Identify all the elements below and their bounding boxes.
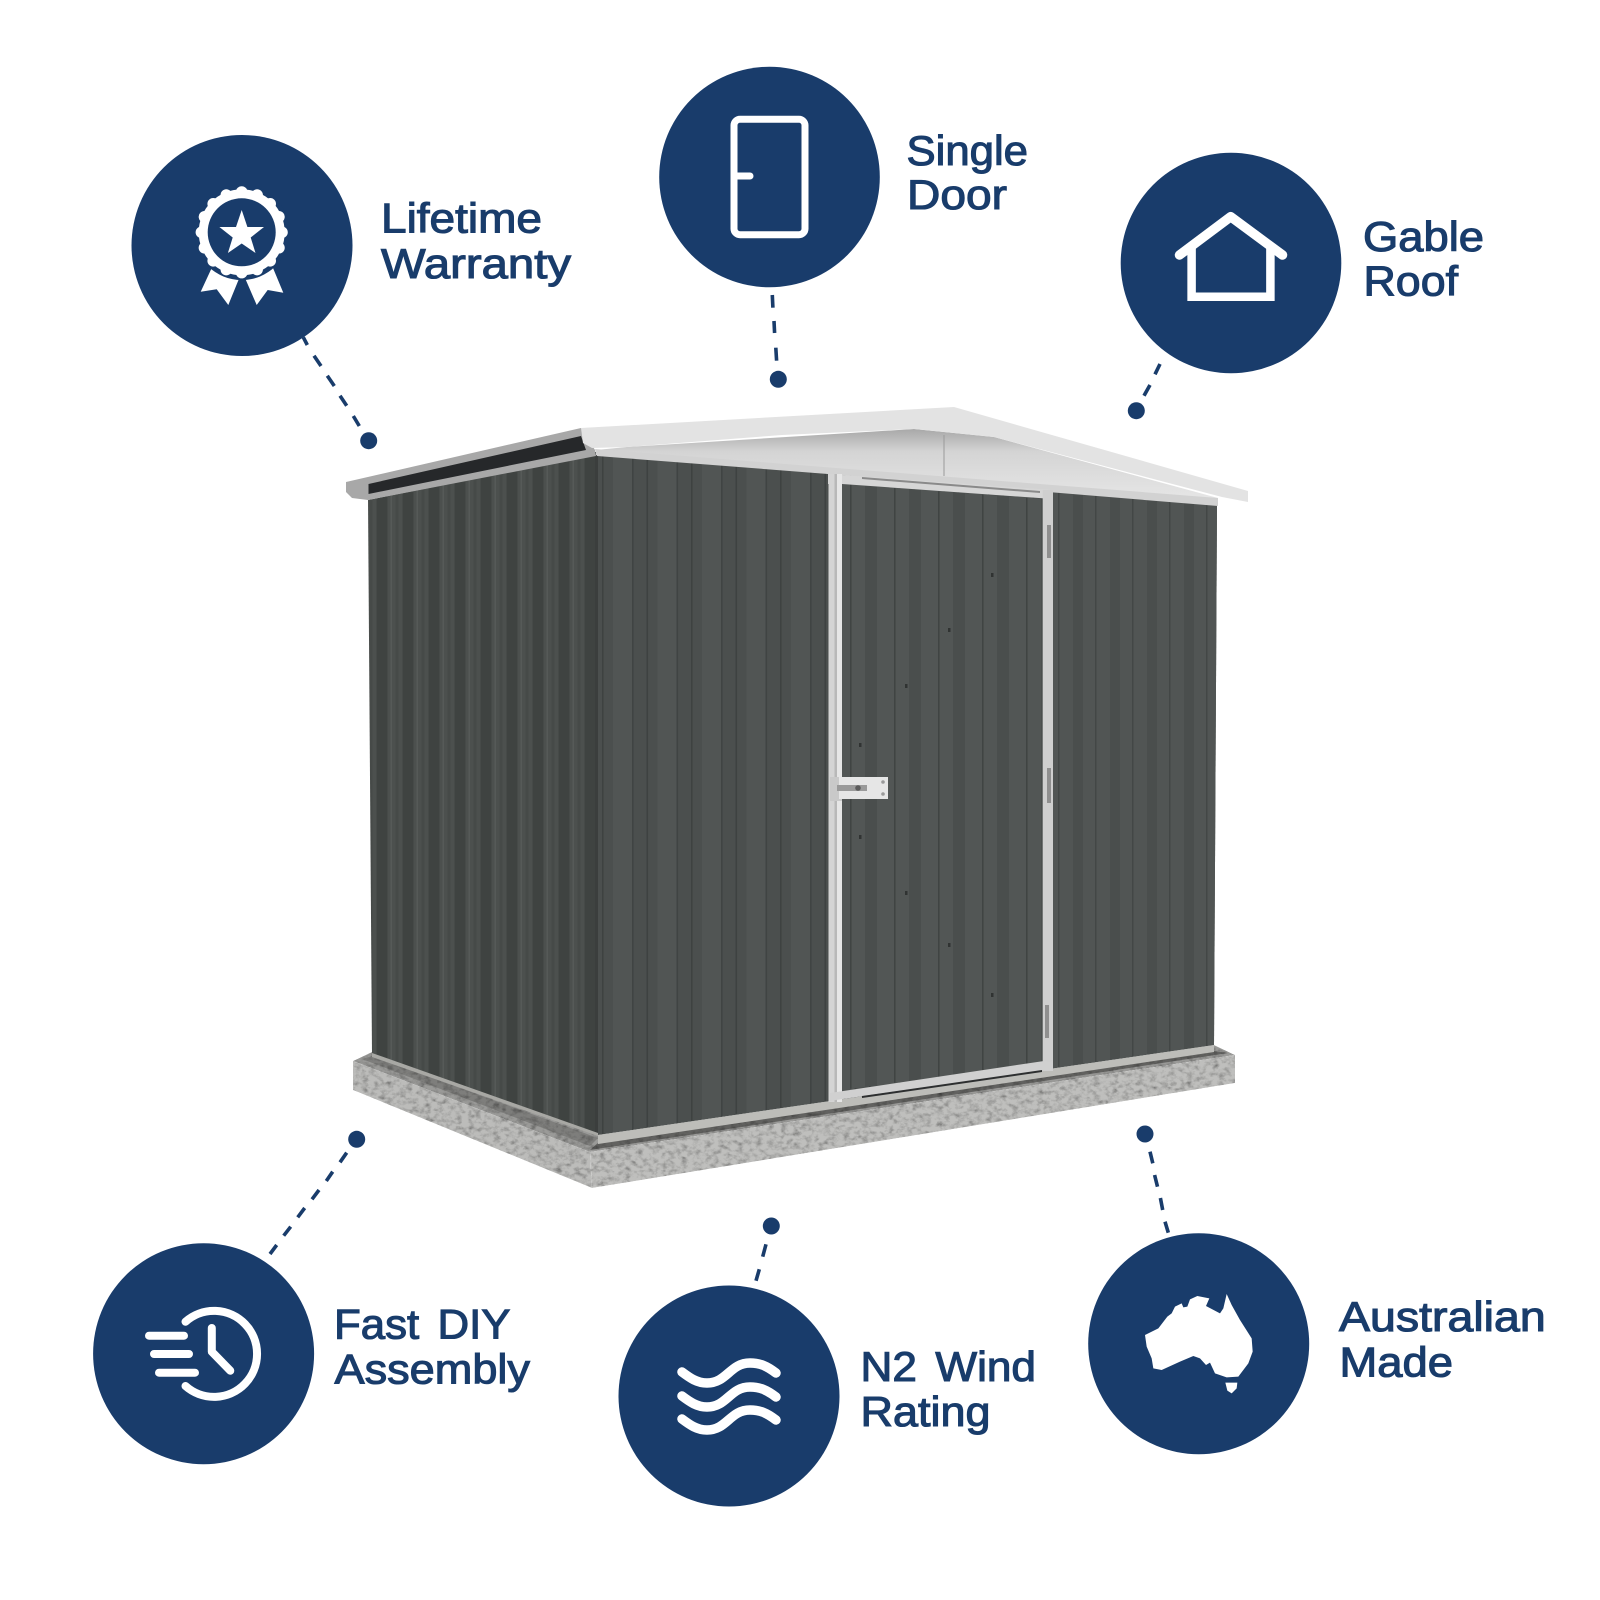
left roof edge xyxy=(346,428,596,500)
gable trim xyxy=(595,449,1218,506)
label: Rating xyxy=(860,1388,990,1435)
label: Assembly xyxy=(334,1345,530,1392)
label: N2 Wind xyxy=(860,1343,1036,1390)
left wall xyxy=(368,455,598,1135)
shed illustration xyxy=(346,407,1248,1188)
label: Door xyxy=(907,171,1007,218)
door screws xyxy=(859,573,994,997)
badge circle xyxy=(93,1243,314,1464)
door frame xyxy=(828,474,1053,1102)
roof gutter shadow xyxy=(368,436,586,494)
door panel xyxy=(841,484,1043,1090)
connector xyxy=(756,1218,780,1281)
label: Warranty xyxy=(381,240,571,287)
callout: Australian Made xyxy=(1088,1126,1546,1454)
label: Australian xyxy=(1339,1293,1546,1340)
icon: house xyxy=(1180,217,1282,297)
badge circle xyxy=(618,1286,840,1506)
badge circle xyxy=(132,135,352,356)
label: Gable xyxy=(1363,213,1484,260)
label: Made xyxy=(1340,1339,1453,1386)
icon: award ribbon xyxy=(194,184,290,305)
concrete slab xyxy=(353,1045,1235,1188)
gable divider xyxy=(944,435,945,476)
connector xyxy=(270,1131,365,1254)
callout: Single Door xyxy=(659,67,1028,388)
icon: fast clock xyxy=(149,1311,257,1397)
badge circle xyxy=(1088,1233,1309,1454)
callout: Gable Roof xyxy=(1121,153,1484,419)
right wall panel xyxy=(1053,489,1217,1068)
icon: door xyxy=(734,119,805,235)
callout: N2 Wind Rating xyxy=(618,1218,1036,1506)
door latch xyxy=(830,777,888,801)
callout: Fast DIY Assembly xyxy=(93,1131,530,1464)
label: Fast DIY xyxy=(334,1300,510,1347)
bottom trim xyxy=(598,1045,1214,1144)
badge circle xyxy=(1121,153,1341,373)
label: Roof xyxy=(1364,258,1458,305)
icon: map of Australia xyxy=(1145,1294,1253,1393)
gable end xyxy=(596,429,1218,505)
label: Lifetime xyxy=(381,195,542,242)
callout: Lifetime Warranty xyxy=(132,135,571,449)
front wall xyxy=(596,455,1217,1135)
connector xyxy=(1128,364,1160,419)
roof top xyxy=(581,407,1248,502)
connector xyxy=(1136,1126,1168,1233)
badge circle xyxy=(659,67,880,287)
left bottom trim xyxy=(372,1053,598,1136)
door hinges xyxy=(1045,525,1051,1038)
label: Single xyxy=(906,127,1028,174)
connector xyxy=(770,295,787,388)
wall corner xyxy=(595,452,598,1135)
icon: wind waves xyxy=(682,1363,776,1430)
connector xyxy=(303,337,377,449)
